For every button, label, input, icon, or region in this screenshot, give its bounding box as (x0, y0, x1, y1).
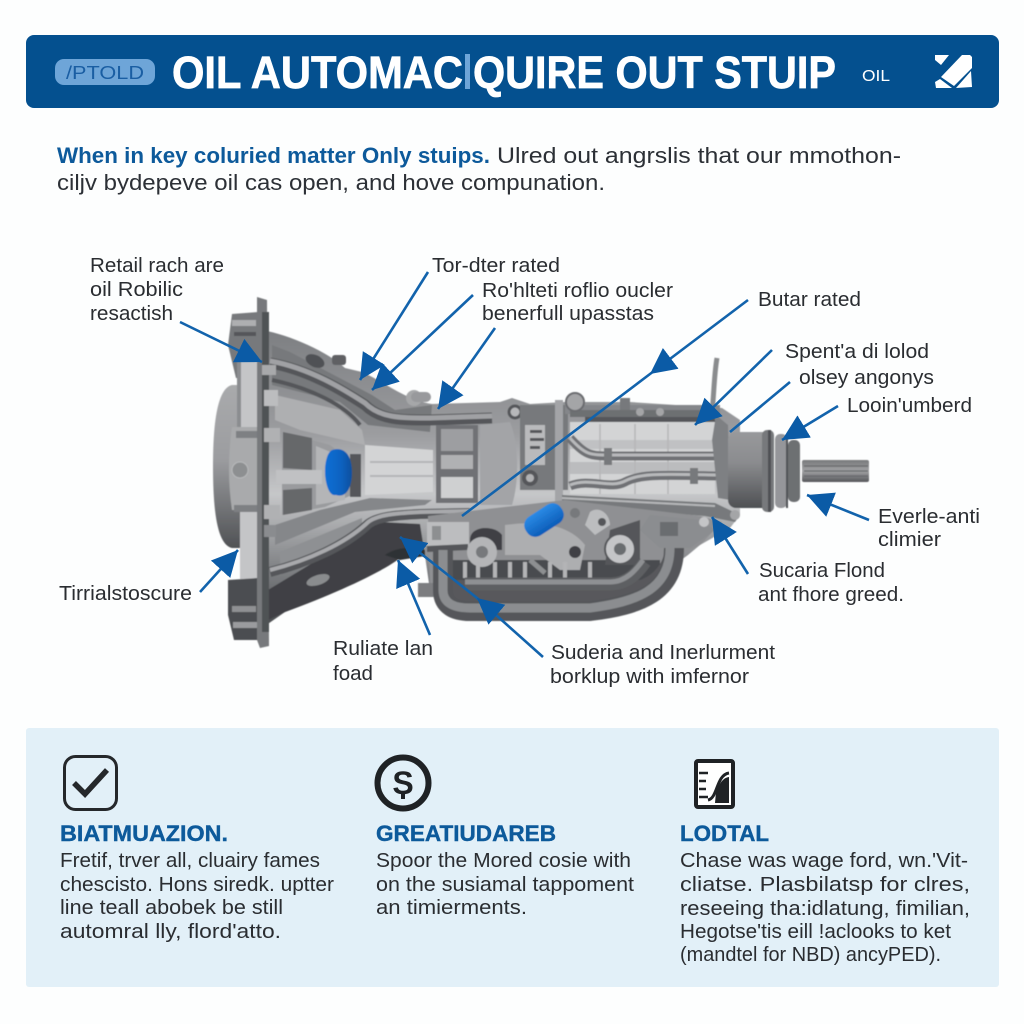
arrow: spent (695, 350, 772, 425)
top bosses (332, 355, 346, 365)
body text: Hegotse'tis eill !aclooks to ket (680, 920, 951, 943)
label: sucaria: Sucaria Flond (759, 560, 885, 582)
arrow: benerfull (438, 328, 495, 409)
label: spent (785, 341, 934, 389)
bell inner upper panel (272, 345, 432, 432)
body text: (mandtel for NBD) ancyPED). (680, 943, 941, 966)
label: everle: Everle-anti (878, 506, 980, 528)
label: sucaria (758, 560, 904, 606)
body text: Spoor the Mored cosie with (376, 849, 631, 872)
upper rib tube (270, 363, 492, 420)
heading: BIATMUAZION. (60, 821, 228, 846)
blue part on bell (325, 449, 352, 496)
body text: reseeing tha:idlatung, fimilian, (680, 897, 970, 920)
arrow: ro'hlteti (372, 295, 473, 390)
label: ruliate: foad (333, 663, 373, 685)
icon: checkmark (64, 756, 116, 810)
dipstick (712, 358, 717, 412)
label: butar: Butar rated (758, 289, 861, 311)
body text (680, 849, 970, 966)
tail housing (728, 430, 800, 512)
lower mechanical block (427, 500, 722, 590)
label: looin: Looin'umberd (847, 395, 972, 417)
icon: document chart (696, 761, 733, 807)
callout labels (59, 255, 980, 688)
callout arrows (180, 272, 869, 657)
label: suderia: borklup with imfernor (550, 666, 749, 688)
intro text: ciljv bydepeve oil cas open, and hove compunation. (57, 170, 605, 195)
column: greatiudareb (376, 758, 634, 919)
label: ro'hlteti: Ro'hlteti roflio oucler (482, 280, 673, 302)
main housing (262, 330, 740, 628)
label: everle (878, 506, 980, 551)
arrow: tor-dter (360, 272, 428, 380)
gearbox body (520, 393, 740, 522)
heading: GREATIUDAREB (376, 821, 556, 846)
arrow: everle (807, 495, 869, 520)
body text: on the susiamal tappoment (376, 873, 634, 896)
drum at left (213, 385, 250, 548)
label: ruliate: Ruliate lan (333, 638, 433, 660)
lower rib tube (270, 513, 470, 572)
arrow: retail (180, 322, 262, 362)
arrow: looin (782, 406, 838, 440)
body text: cliatse. Plasbilatsp for clres, (680, 873, 970, 896)
heading: LODTAL (680, 821, 769, 846)
flange (228, 297, 280, 648)
column: biatmuazion (60, 756, 334, 943)
diagram: transmission (213, 297, 869, 648)
label: retail (90, 255, 224, 325)
label: suderia (550, 642, 775, 688)
badge: PTOLD: /PTOLD (66, 63, 144, 83)
blue oil cylinder (520, 499, 568, 541)
label: spent: Spent'a di lolod (785, 341, 929, 363)
label: retail: Retail rach are (90, 255, 224, 277)
label: sucaria: ant fhore greed. (758, 584, 904, 606)
intro text: When in key coluried matter Only stuips. (57, 143, 490, 168)
arrow: olsey (730, 382, 790, 432)
arrow: ruliate (398, 560, 430, 635)
body text: an timierments. (376, 896, 527, 919)
icon: logo mark (935, 55, 972, 88)
arrow: sucaria (712, 517, 748, 574)
windows (441, 429, 473, 451)
window frame (436, 425, 478, 503)
body text (376, 849, 634, 919)
bell dark lower shading (268, 522, 425, 620)
small tag: OIL: OIL (862, 68, 890, 85)
body text: line teall abobek be still (60, 896, 283, 919)
icon: dollar coin: S (392, 765, 414, 801)
panel: bottom info (26, 728, 999, 987)
label: suderia: Suderia and Inerlurment (551, 642, 775, 664)
intro text: Ulred out angrslis that our mmothon- (497, 143, 901, 168)
body text: chescisto. Hons siredk. uptter (60, 873, 334, 896)
badge: PTOLD (55, 59, 155, 85)
label: ro'hlteti (482, 280, 673, 325)
icon: dollar coin (378, 758, 428, 808)
output shaft (802, 460, 869, 482)
label: retail: oil Robilic (90, 279, 183, 301)
label: spent: olsey angonys (799, 367, 934, 389)
exhaust pipes (418, 548, 676, 611)
label: tor-dter: Tor-dter rated (432, 255, 560, 277)
label: ruliate (333, 638, 433, 685)
body text: Chase was wage ford, wn.'Vit- (680, 849, 968, 872)
arrow: tirrial (200, 550, 238, 592)
title: QUIRE OUT STUIP (473, 47, 836, 98)
bell lower panel (275, 498, 432, 545)
label: everle: climier (878, 529, 941, 551)
label: tirrial: Tirrialstoscure (59, 583, 192, 605)
header banner (26, 35, 999, 108)
right bell panel (480, 422, 517, 505)
body text: Fretif, trver all, cluairy fames (60, 849, 320, 872)
title (172, 47, 836, 98)
label: retail: resactish (90, 303, 173, 325)
intro text (57, 143, 901, 195)
column: lodtal (680, 761, 970, 966)
arrow: suderia (400, 537, 543, 657)
title: OIL AUTOMAC (172, 47, 463, 98)
label: ro'hlteti: benerfull upasstas (482, 303, 654, 325)
body text (60, 849, 334, 943)
arrow: butar rated (462, 300, 748, 516)
body text: automral lly, flord'atto. (60, 920, 281, 943)
